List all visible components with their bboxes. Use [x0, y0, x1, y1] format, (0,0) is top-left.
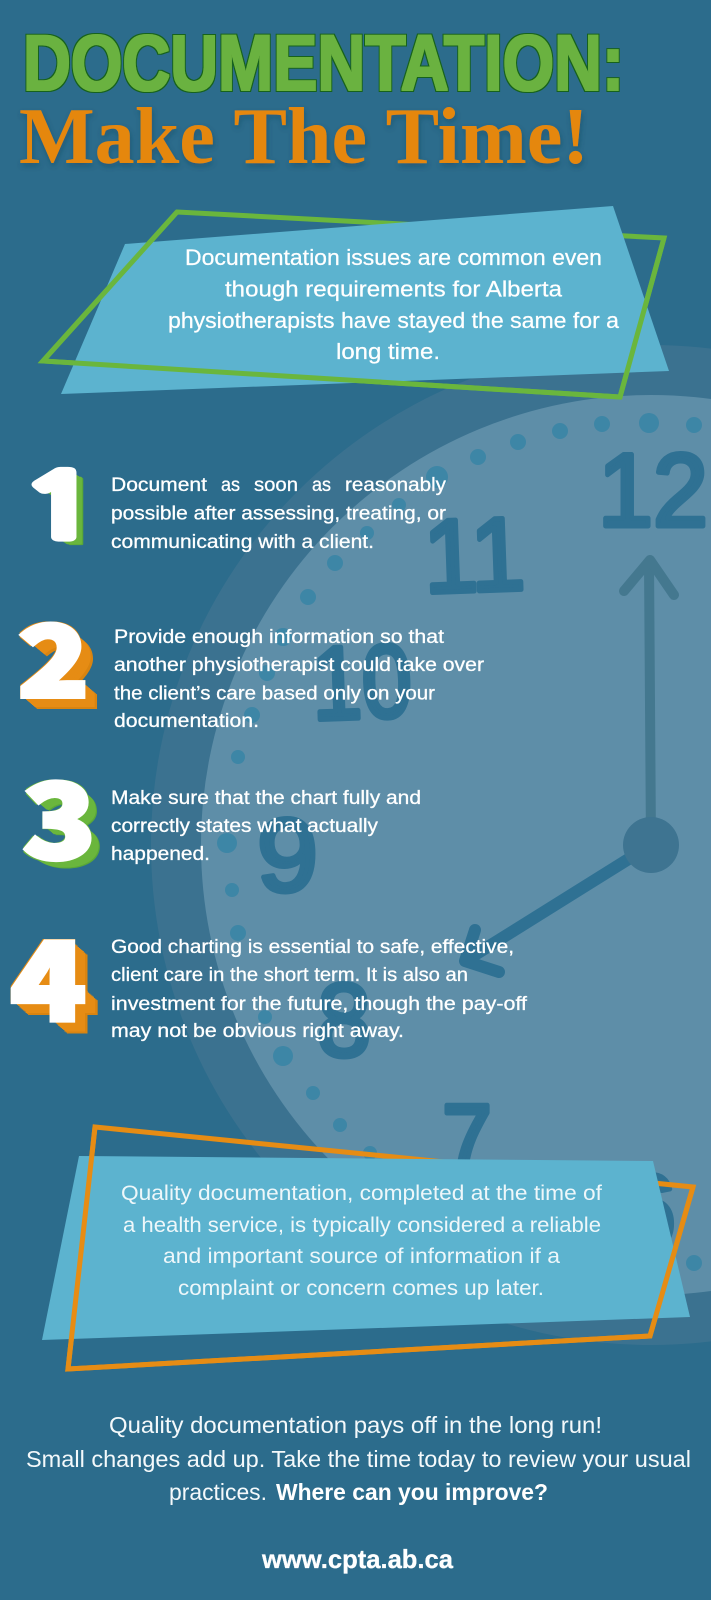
title line 2: Make The Time! — [19, 91, 589, 181]
quality text: complaint or concern comes up later. — [178, 1276, 544, 1300]
clock outer ring — [151, 345, 711, 1345]
clock face — [201, 395, 711, 1295]
numeral 2: 2 — [18, 582, 89, 726]
clock numerals: 10 — [310, 623, 414, 743]
step 1 text: soon — [254, 474, 298, 496]
clock numerals — [257, 433, 708, 1270]
step 2 text: documentation. — [114, 710, 259, 732]
step 1 text: possible after assessing, treating, or — [111, 502, 447, 524]
clock numerals: 6 — [622, 1154, 676, 1270]
quality text: and important source of information if a — [163, 1244, 560, 1268]
closing message: practices. — [169, 1479, 267, 1505]
step 1 text: reasonably — [345, 474, 446, 496]
numeral 4: 4 — [10, 894, 86, 1052]
step 1 text: as — [312, 474, 331, 496]
clock minute dots — [217, 413, 702, 1271]
step 4 text: Good charting is essential to safe, effective, — [111, 936, 514, 958]
intro text: long time. — [336, 339, 440, 364]
panel: quality callout — [42, 1127, 693, 1369]
panel: intro callout — [43, 206, 669, 397]
clock numerals: 7 — [442, 1084, 492, 1200]
intro text: Documentation issues are common even — [185, 245, 602, 270]
clock numerals: 9 — [257, 798, 318, 914]
intro text: though requirements for Alberta — [225, 276, 563, 302]
step 4 text: may not be obvious right away. — [111, 1020, 404, 1042]
step 1 text: communicating with a client. — [111, 531, 374, 553]
step 4 text: client care in the short term. It is also an — [111, 964, 468, 986]
step 3 text: correctly states what actually — [111, 815, 378, 837]
closing message: Where can you improve? — [276, 1479, 548, 1505]
title — [19, 18, 624, 181]
step 1 text: as — [221, 474, 240, 496]
step 3 text: Make sure that the chart fully and — [111, 787, 421, 809]
quality text: a health service, is typically considered a reliable — [123, 1213, 601, 1237]
clock illustration — [151, 345, 711, 1345]
clock pivot — [623, 817, 679, 873]
numeral 1: 1 — [20, 463, 102, 551]
website: www.cpta.ab.ca — [261, 1544, 454, 1574]
intro text: physiotherapists have stayed the same for a — [168, 308, 620, 333]
numeral 3: 3 — [23, 738, 96, 889]
closing message: Small changes add up. Take the time today to review your usual — [26, 1446, 691, 1472]
clock numerals: 8 — [317, 963, 371, 1079]
step 2 text: Provide enough information so that — [114, 626, 445, 648]
step 3 text: happened. — [111, 843, 210, 865]
quality text: Quality documentation, completed at the time of — [121, 1181, 602, 1205]
step 2 text: another physiotherapist could take over — [114, 654, 485, 676]
clock minute hand — [624, 560, 674, 845]
clock hour hand — [465, 845, 651, 972]
clock numerals: 11 — [422, 496, 527, 616]
step 1 text: Document — [111, 474, 208, 496]
step 4 text: investment for the future, though the pay-off — [111, 993, 528, 1015]
clock numerals: 12 — [598, 433, 708, 549]
closing message: Quality documentation pays off in the long run! — [109, 1412, 602, 1438]
step 2 text: the client’s care based only on your — [114, 682, 436, 704]
